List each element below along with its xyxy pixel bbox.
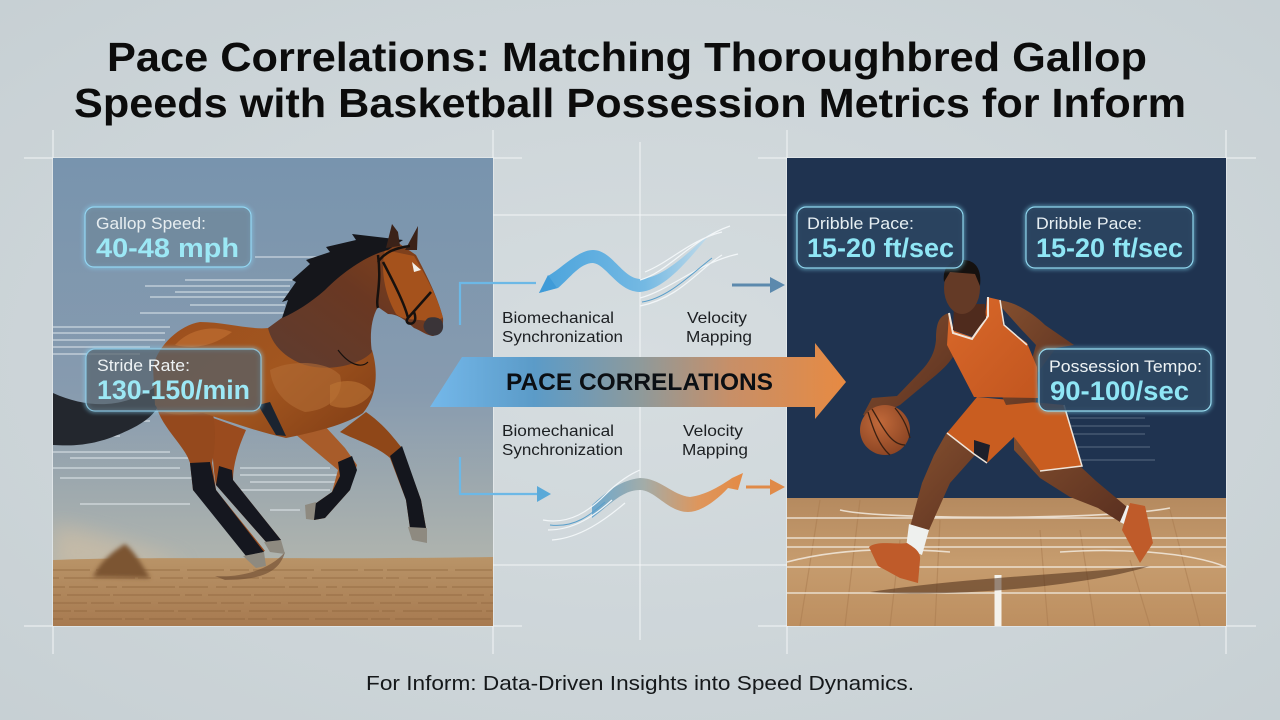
callout: possession tempo: 90-100/sec xyxy=(1050,376,1189,406)
left arm xyxy=(863,313,958,418)
labels above arrow: Synchronization xyxy=(502,329,623,346)
labels below arrow xyxy=(502,423,748,459)
hooves xyxy=(243,502,427,568)
labels below arrow: Velocity xyxy=(683,423,743,440)
callout: gallop speed: 40-48 mph xyxy=(96,233,239,263)
body xyxy=(153,322,376,438)
callout: dribble pace 2: Dribble Pace: xyxy=(1036,215,1142,233)
court floor xyxy=(787,498,1226,626)
labels below arrow: Mapping xyxy=(682,442,748,459)
far rear leg xyxy=(205,415,281,543)
bridle xyxy=(377,246,431,324)
shorts xyxy=(947,397,1082,471)
motion lines xyxy=(1070,418,1155,460)
right arm xyxy=(995,300,1074,405)
dust cloud xyxy=(93,544,150,578)
callout: gallop speed: Gallop Speed: xyxy=(96,215,206,233)
icon: player xyxy=(860,260,1153,583)
floor shadow xyxy=(870,566,1150,593)
callout: stride rate xyxy=(86,349,261,411)
labels above arrow xyxy=(502,310,752,346)
muscle highlights xyxy=(175,328,232,347)
track xyxy=(53,557,493,626)
callout: dribble pace 1 xyxy=(797,207,963,268)
guide lines xyxy=(24,130,1256,654)
small connector arrows xyxy=(460,277,785,502)
footer caption: For Inform: Data-Driven Insights into Speed Dynamics. xyxy=(366,672,914,695)
dust haze xyxy=(53,523,166,560)
title xyxy=(74,34,1186,126)
callout: dribble pace 1: 15-20 ft/sec xyxy=(807,233,954,263)
far front leg xyxy=(340,412,426,528)
near front leg xyxy=(288,412,357,520)
socks and shoes xyxy=(906,524,929,555)
labels above arrow: Velocity xyxy=(687,310,747,327)
callout: gallop speed xyxy=(85,207,251,267)
title: Speeds with Basketball Possession Metrics for Inform xyxy=(74,80,1186,126)
panel: basketball player xyxy=(787,158,1226,626)
callout: stride rate: Stride Rate: xyxy=(97,357,190,375)
title: Pace Correlations: Matching Thoroughbred Gallop xyxy=(107,34,1147,80)
speed streaks xyxy=(53,257,345,510)
mane xyxy=(282,234,403,318)
labels below arrow: Synchronization xyxy=(502,442,623,459)
panel: horse xyxy=(53,158,493,626)
jersey xyxy=(947,297,1038,398)
callout: stride rate: 130-150/min xyxy=(97,375,250,405)
tail xyxy=(53,385,158,445)
callout: dribble pace 2 xyxy=(1026,207,1193,268)
icon: horse xyxy=(53,224,443,568)
near rear leg xyxy=(155,400,265,555)
basketball xyxy=(860,405,910,455)
labels above arrow: Biomechanical xyxy=(502,310,614,327)
central arrow: pace correlations xyxy=(430,343,846,419)
callout: possession tempo: Possession Tempo: xyxy=(1049,358,1202,376)
neck and head xyxy=(953,304,986,336)
callout: possession tempo xyxy=(1039,349,1211,411)
girth strap xyxy=(258,402,286,436)
top wave arrow xyxy=(539,226,738,306)
callout: dribble pace 2: 15-20 ft/sec xyxy=(1036,233,1183,263)
labels below arrow: Biomechanical xyxy=(502,423,614,440)
bottom wave arrow xyxy=(543,470,743,540)
callout: dribble pace 1: Dribble Pace: xyxy=(807,215,914,233)
back leg xyxy=(1014,420,1127,522)
central arrow: pace correlations: PACE CORRELATIONS xyxy=(506,369,773,396)
neck and head xyxy=(268,240,443,368)
front leg xyxy=(910,432,1000,530)
ears xyxy=(386,224,418,250)
labels above arrow: Mapping xyxy=(686,329,752,346)
